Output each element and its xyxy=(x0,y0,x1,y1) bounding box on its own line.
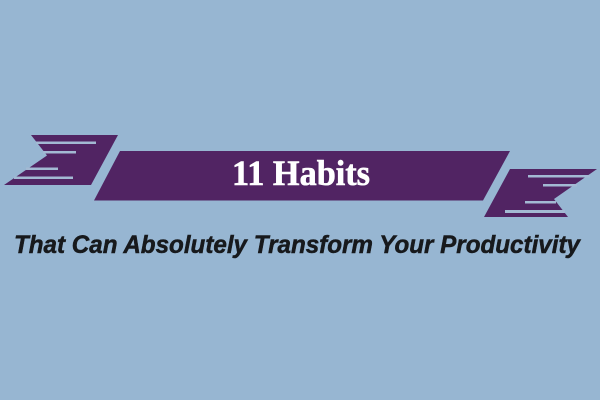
title: 11 Habits xyxy=(232,153,370,193)
subtitle: That Can Absolutely Transform Your Productivity xyxy=(14,231,581,259)
main banner xyxy=(94,151,510,200)
left ribbon tail xyxy=(4,135,118,185)
right ribbon tail xyxy=(484,169,597,217)
